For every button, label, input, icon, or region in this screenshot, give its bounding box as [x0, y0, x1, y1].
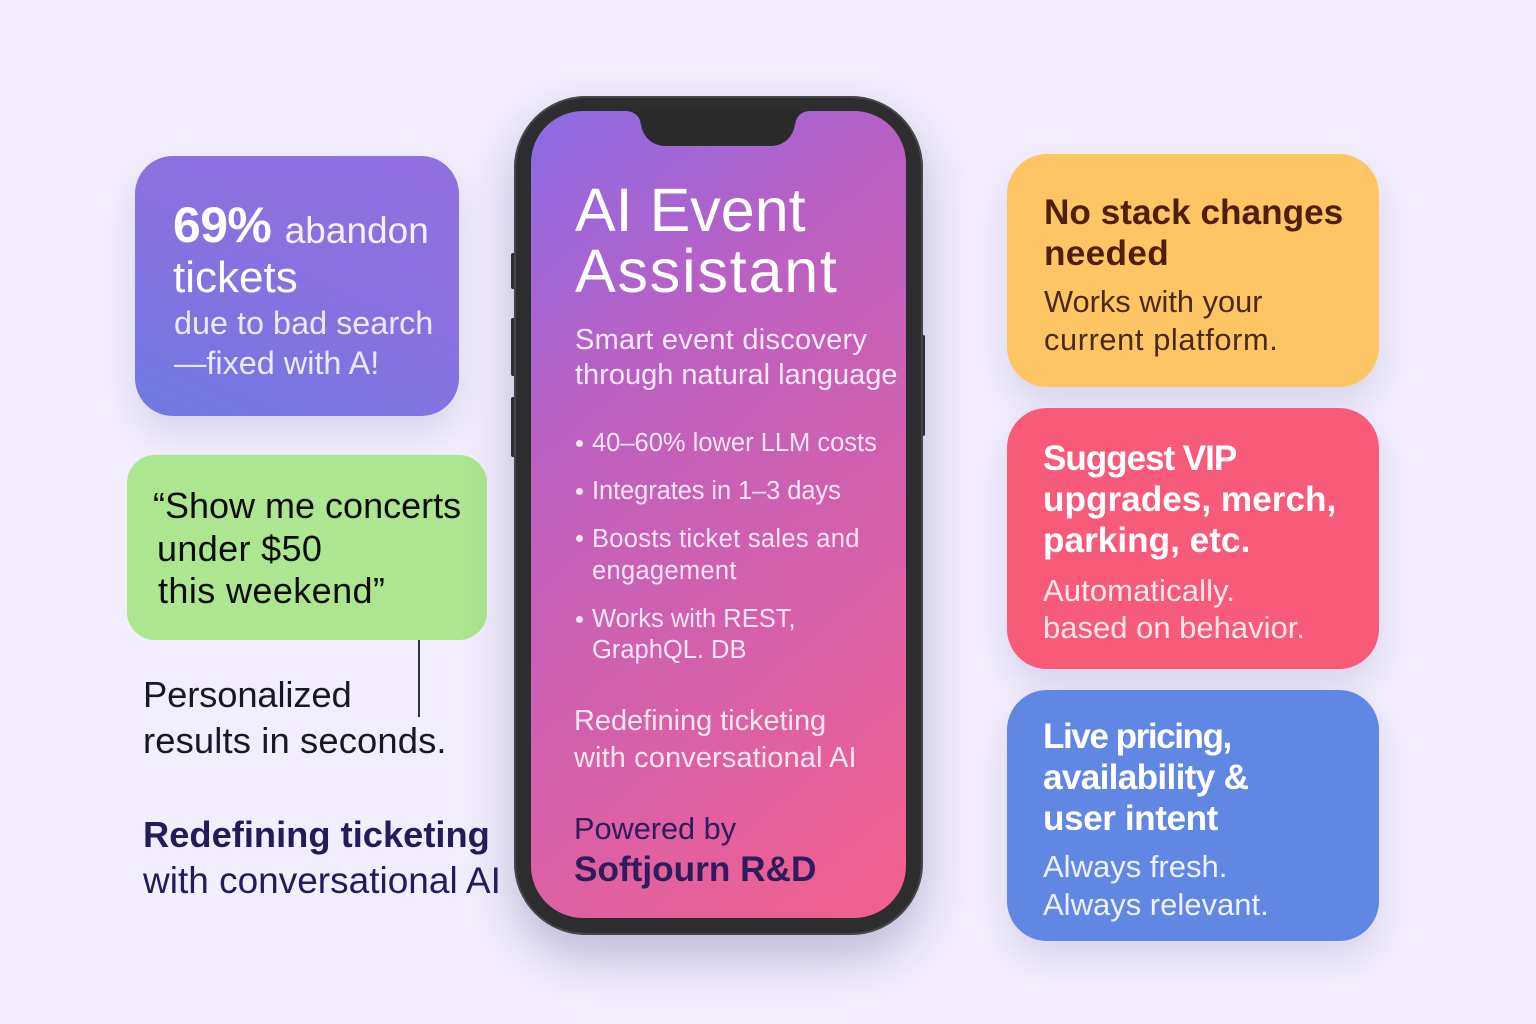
heading: Live pricing, [1043, 717, 1231, 756]
panel: live pricing [1007, 690, 1379, 941]
query text [153, 485, 461, 611]
body: Always fresh. [1043, 849, 1227, 884]
heading: parking, etc. [1043, 521, 1250, 560]
heading: Suggest VIP [1043, 439, 1236, 478]
stat detail [174, 305, 433, 381]
phone tagline: Redefining ticketing [574, 705, 826, 737]
heading: needed [1044, 234, 1169, 273]
stat text line 2: tickets [173, 253, 298, 302]
body: Automatically. [1043, 573, 1235, 608]
bullet 4: Works with REST, [592, 605, 796, 633]
phone title: Assistant [575, 237, 839, 305]
feature list [576, 429, 877, 664]
bullet 3: Boosts ticket sales and [592, 525, 860, 553]
heading: user intent [1043, 799, 1218, 838]
body [1043, 573, 1305, 645]
notch left corner [627, 111, 641, 125]
heading: upgrades, merch, [1043, 480, 1336, 519]
bullet 2: Integrates in 1–3 days [592, 477, 841, 505]
panel: abandon stat card [135, 156, 459, 416]
personalized results text: Personalized [143, 674, 352, 715]
body: Works with your [1044, 284, 1262, 319]
body [1044, 284, 1278, 357]
personalized results text: results in seconds. [143, 720, 447, 761]
heading [1043, 439, 1336, 560]
notch right corner [795, 111, 809, 125]
heading: No stack changes [1044, 193, 1343, 232]
query text: under $50 [157, 528, 322, 568]
stat detail: due to bad search [174, 305, 433, 341]
body: current platform. [1044, 322, 1278, 357]
phone notch [641, 108, 795, 146]
phone tagline: with conversational AI [574, 742, 857, 774]
phone title [575, 176, 839, 305]
bullet 4 [576, 605, 796, 664]
phone subtitle: Smart event discovery [575, 324, 867, 356]
bullet 3: engagement [592, 557, 737, 585]
phone body [514, 96, 923, 935]
tagline left: Redefining ticketing [143, 814, 490, 855]
softjourn: Softjourn R&D [574, 850, 816, 889]
phone subtitle: through natural language [575, 359, 897, 391]
bullet 1: 40–60% lower LLM costs [592, 429, 877, 457]
body [1043, 849, 1269, 922]
tagline left: with conversational AI [143, 860, 501, 901]
query text: this weekend” [158, 570, 385, 611]
tagline left [143, 814, 501, 901]
powered by: Powered by [574, 811, 736, 846]
heading [1044, 193, 1343, 273]
body: based on behavior. [1043, 610, 1305, 645]
panel: suggest VIP [1007, 408, 1379, 669]
bullet 4: GraphQL. DB [592, 636, 746, 664]
connector line [418, 640, 420, 717]
phone title: AI Event [575, 176, 806, 244]
phone side buttons [511, 253, 925, 457]
panel: no stack changes [1007, 154, 1379, 387]
phone tagline [574, 705, 857, 774]
stat detail: —fixed with A! [174, 345, 379, 381]
phone [488, 92, 950, 984]
stat headline: 69% abandon [173, 197, 429, 253]
query text: “Show me concerts [153, 485, 461, 526]
heading [1043, 717, 1248, 838]
personalized results text [143, 674, 447, 761]
heading: availability & [1043, 758, 1248, 797]
body: Always relevant. [1043, 887, 1269, 922]
bullet 3 [576, 525, 860, 585]
phone subtitle [575, 324, 897, 391]
panel: query card [127, 455, 487, 640]
phone screen [531, 111, 906, 918]
